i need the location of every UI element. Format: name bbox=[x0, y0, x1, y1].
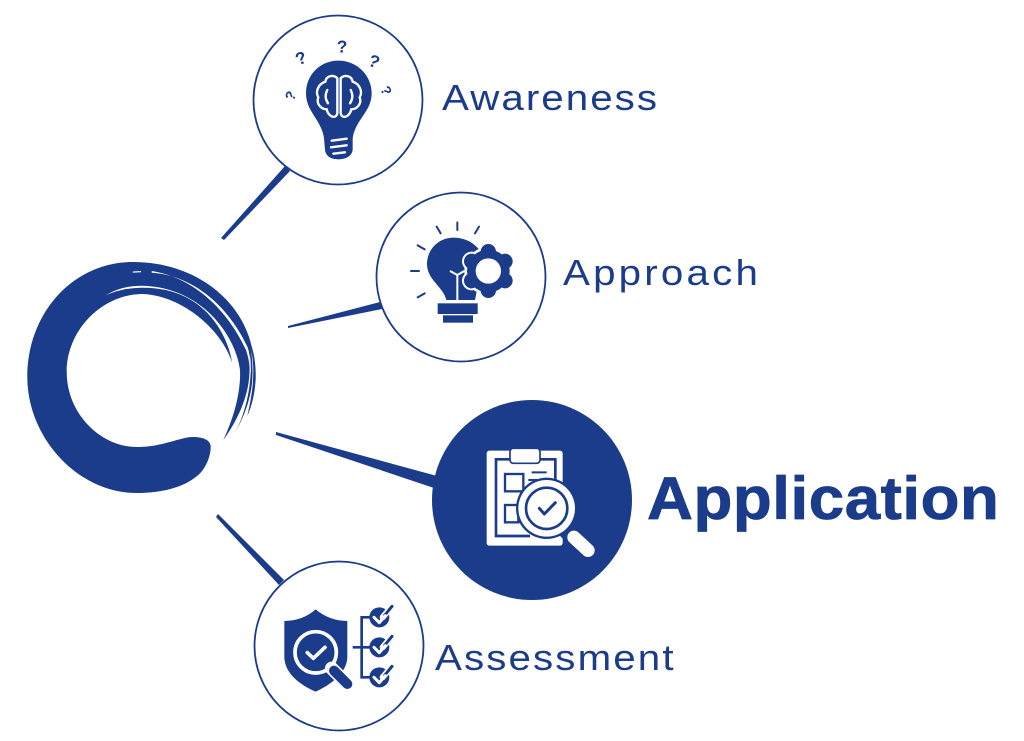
panel: assessment bbox=[254, 562, 674, 730]
awareness label: Awareness bbox=[442, 78, 657, 118]
approach circle bbox=[376, 192, 546, 362]
panel: awareness bbox=[254, 16, 657, 184]
assessment label: Assessment bbox=[435, 638, 674, 678]
icon: shield with magnifier and checklist bbox=[284, 605, 393, 692]
panel: approach bbox=[376, 192, 758, 362]
enso circle bbox=[27, 262, 256, 493]
connector: enso to awareness bbox=[221, 166, 290, 240]
icon: brain light bulb with question marks: ? bbox=[292, 47, 310, 69]
icon: brain light bulb with question marks: ? bbox=[337, 37, 347, 57]
application circle bbox=[432, 400, 632, 600]
panel: application bbox=[432, 400, 999, 600]
icon: brain light bulb with question marks bbox=[281, 37, 395, 159]
icon: brain light bulb with question marks: ? bbox=[365, 50, 383, 73]
icon: clipboard with magnifier bbox=[487, 448, 588, 550]
assessment circle bbox=[254, 562, 424, 730]
icon: brain light bulb with question marks: ? bbox=[281, 88, 299, 103]
icon: light bulb with gear bbox=[411, 222, 512, 323]
connector: enso to approach bbox=[288, 302, 382, 328]
connector: enso to assessment bbox=[216, 514, 284, 585]
application label: Application bbox=[647, 466, 999, 533]
awareness circle bbox=[254, 16, 422, 184]
approach label: Approach bbox=[563, 253, 758, 293]
icon: brain light bulb with question marks: ? bbox=[377, 83, 395, 98]
connector: enso to application bbox=[276, 432, 437, 488]
